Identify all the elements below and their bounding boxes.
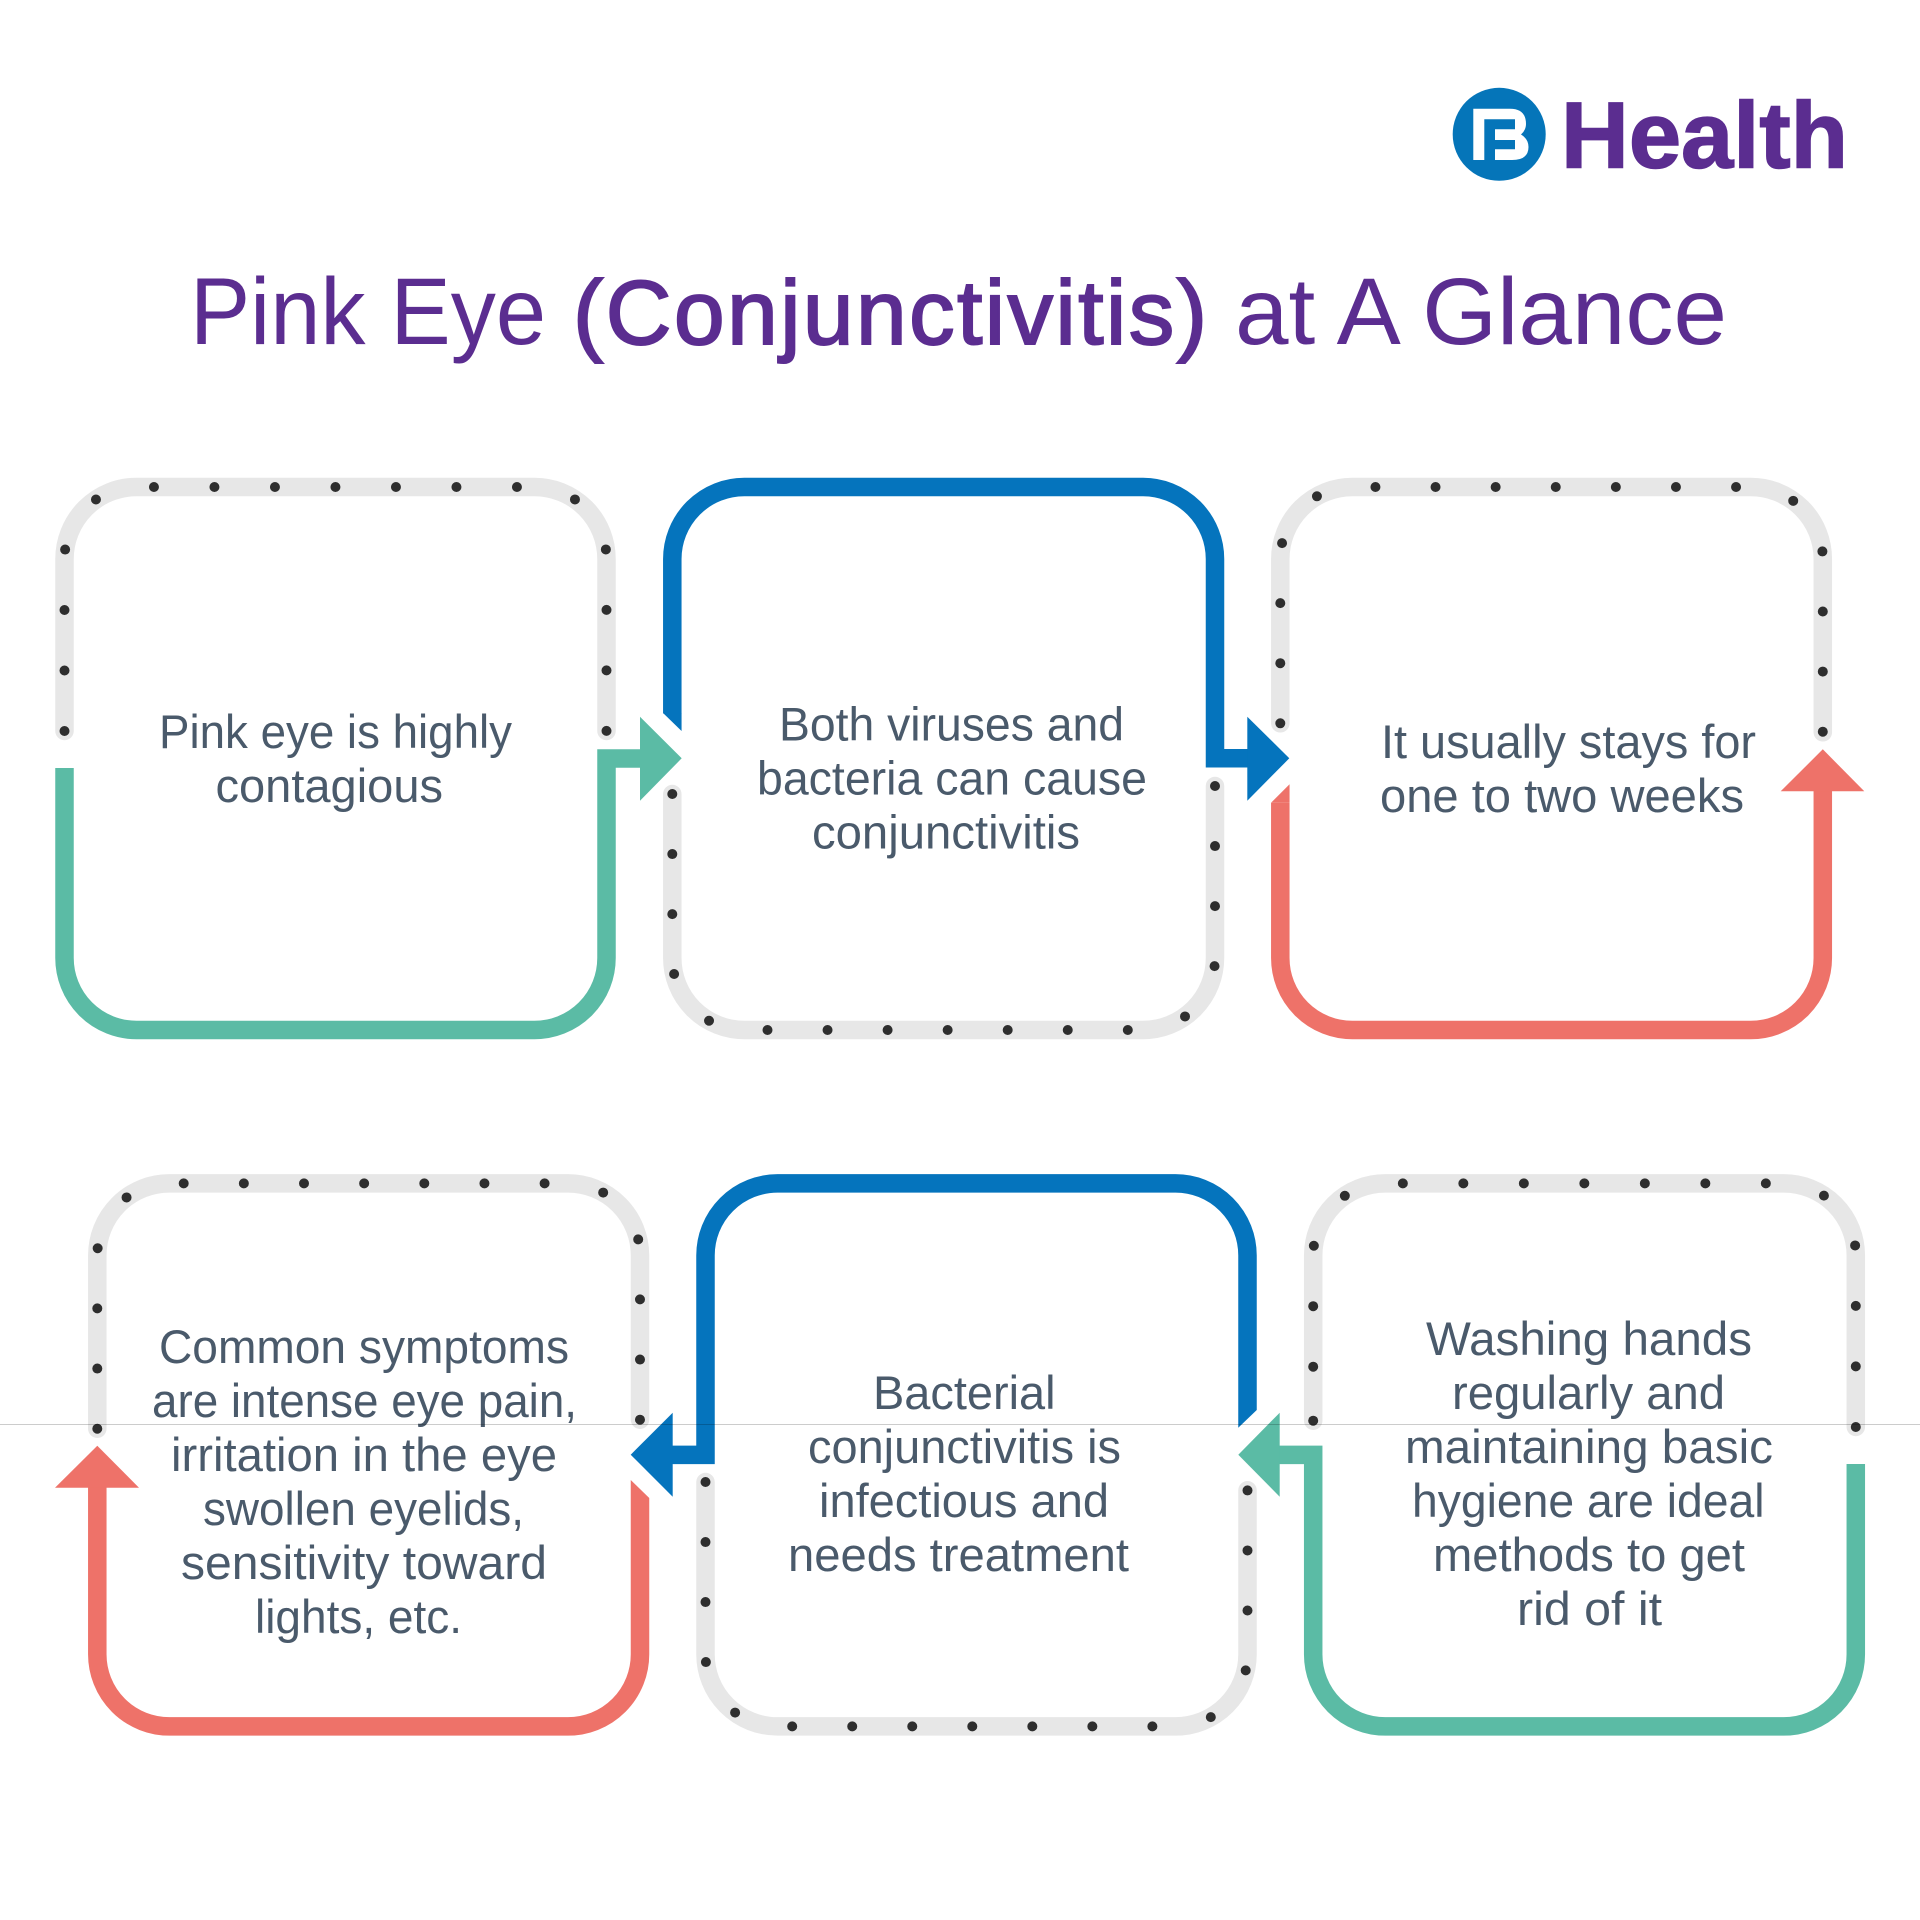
icon: B mark in blue circle xyxy=(1453,88,1546,181)
panel text: one to two weeks xyxy=(1380,769,1744,822)
panel: bacterial conjunctivitis xyxy=(631,1183,1257,1726)
coral arrow xyxy=(55,1446,649,1726)
panel text: bacteria can cause xyxy=(757,752,1147,804)
dotted track xyxy=(1280,487,1823,732)
panel: duration xyxy=(1271,487,1864,1030)
dotted track xyxy=(97,1183,640,1429)
green arrow xyxy=(1238,1413,1856,1726)
panel text: needs treatment xyxy=(788,1528,1129,1581)
panel text: infectious and xyxy=(819,1474,1109,1527)
panel: viruses and bacteria xyxy=(663,487,1289,1030)
panel text: contagious xyxy=(216,759,443,812)
panel text: lights, etc. xyxy=(255,1590,462,1643)
panel: common symptoms xyxy=(55,1183,649,1726)
panel text: Pink eye is highly xyxy=(159,705,512,758)
blue arrow xyxy=(663,487,1289,801)
panel text: Washing hands xyxy=(1426,1312,1752,1365)
panel text: maintaining basic xyxy=(1405,1420,1773,1473)
dotted track xyxy=(64,487,606,731)
panel text: irritation in the eye xyxy=(171,1428,557,1481)
panel text: Both viruses and xyxy=(779,698,1124,750)
dotted track xyxy=(706,1482,1248,1726)
panel: washing hands xyxy=(1238,1183,1861,1726)
title: at A Glance xyxy=(1235,259,1727,365)
panel: highly contagious xyxy=(64,487,682,1030)
logo: Bajaj Finserv Health xyxy=(1453,83,1848,188)
panel text: Common symptoms xyxy=(159,1320,569,1373)
title: (Conjunctivitis) xyxy=(573,263,1207,364)
panel text: rid of it xyxy=(1517,1582,1662,1635)
panel text: conjunctivitis xyxy=(812,806,1080,858)
green arrow xyxy=(64,717,682,1030)
logo wordmark: Health xyxy=(1561,83,1848,188)
panel text: hygiene are ideal xyxy=(1412,1474,1764,1527)
title: Pink Eye xyxy=(190,259,546,365)
panel text: swollen eyelids, xyxy=(203,1482,524,1535)
dotted track xyxy=(672,786,1215,1030)
panel text: Bacterial xyxy=(873,1366,1056,1419)
blue arrow xyxy=(631,1183,1257,1497)
panel text: regularly and xyxy=(1452,1366,1725,1419)
panel text: conjunctivitis is xyxy=(808,1420,1121,1473)
panel text: sensitivity toward xyxy=(181,1536,547,1589)
dotted track xyxy=(1308,1183,1861,1432)
panel text: It usually stays for xyxy=(1381,715,1756,768)
title xyxy=(190,259,1727,365)
panel text: are intense eye pain, xyxy=(152,1374,577,1427)
panel text: methods to get xyxy=(1433,1528,1745,1581)
coral arrow xyxy=(1271,749,1864,1030)
